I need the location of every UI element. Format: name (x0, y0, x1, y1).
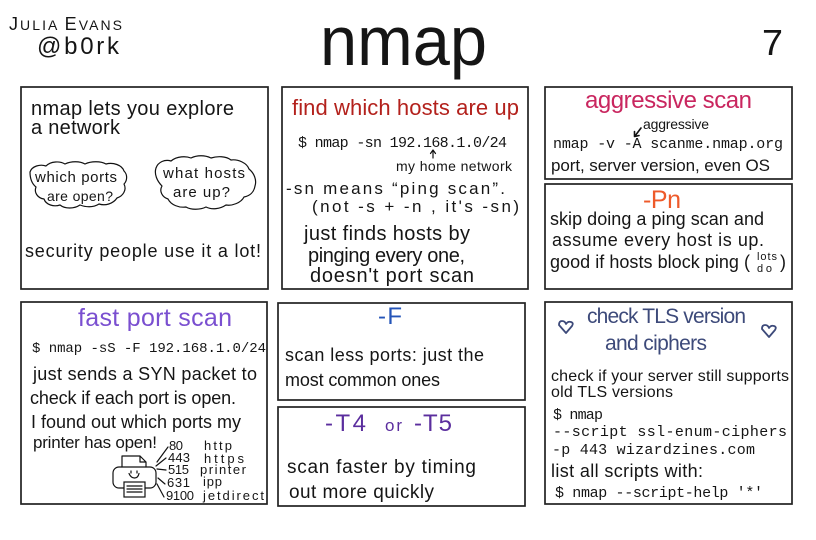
title: nmap (320, 2, 487, 80)
port list: 9100 (166, 488, 194, 503)
description: port, server version, even OS (551, 156, 770, 175)
author credit: JULIA EVANS (9, 14, 122, 34)
list scripts note: list all scripts with: (551, 461, 703, 481)
heading (325, 410, 452, 437)
description (550, 209, 786, 275)
command: $ nmap (553, 407, 603, 424)
port connector lines (156, 447, 168, 497)
explanation: (not -s + -n , it's -sn) (312, 197, 519, 216)
explanation: pinging every one, (308, 245, 465, 267)
port list: 80 (169, 438, 183, 453)
description: scan faster by timing (287, 457, 476, 478)
aggressive note: aggressive (643, 116, 709, 132)
panel: -F (278, 303, 525, 400)
panel: find which hosts are up (282, 87, 528, 289)
description: old TLS versions (551, 384, 673, 401)
port list: 515 (168, 462, 189, 477)
description: check if your server still supports (551, 368, 789, 385)
explanation: check if each port is open. (30, 388, 236, 408)
description: ) (780, 252, 786, 272)
cloud: what hosts are up (155, 156, 256, 209)
heading: and ciphers (605, 332, 707, 355)
explanation: doesn't port scan (310, 265, 474, 287)
icon: right heart (762, 325, 776, 337)
description: most common ones (285, 370, 440, 390)
heading: -F (378, 303, 402, 330)
description: assume every host is up. (552, 230, 764, 250)
port list: 631 (167, 475, 190, 490)
explanation: I found out which ports my (31, 412, 241, 432)
command: $ nmap -sn 192.168.1.0/24 (298, 135, 507, 152)
panel: fast port scan (21, 302, 267, 504)
panel: check TLS version and ciphers (545, 302, 792, 504)
panel: nmap intro (21, 87, 268, 289)
heading: -Pn (643, 186, 681, 214)
cloud: what hosts are up: what hosts (162, 165, 245, 182)
cloud: what hosts are up: are up? (173, 184, 230, 201)
port list: ipp (203, 474, 222, 489)
explanation: just finds hosts by (303, 223, 470, 245)
security note: security people use it a lot! (25, 241, 261, 261)
port list (166, 438, 264, 503)
command: --script ssl-enum-ciphers (553, 424, 787, 441)
cloud: which ports are open (30, 162, 127, 208)
command: -p 443 wizardzines.com (552, 442, 755, 459)
port list: printer (200, 462, 247, 477)
panel: -T4 or -T5 (278, 407, 525, 506)
description (285, 345, 484, 390)
heading: or (385, 416, 402, 435)
author credit: @b0rk (37, 33, 120, 60)
description (287, 457, 476, 503)
heading: aggressive scan (585, 87, 752, 114)
heading: find which hosts are up (292, 95, 519, 120)
heading: -T4 (325, 410, 366, 437)
icon: printer (113, 456, 156, 497)
heading: -T5 (414, 410, 452, 437)
help command: $ nmap --script-help '*' (555, 485, 763, 502)
description: out more quickly (289, 482, 434, 503)
port list: 443 (168, 450, 190, 465)
description: lots (757, 251, 778, 263)
explanation: printer has open! (33, 433, 157, 452)
panel: aggressive scan (545, 87, 792, 179)
page number: 7 (762, 22, 783, 63)
heading (587, 305, 746, 355)
intro text: a network (31, 117, 121, 139)
explanation: just sends a SYN packet to (32, 364, 257, 384)
description: do (757, 263, 772, 275)
heading: check TLS version (587, 305, 746, 328)
port list: jetdirect (202, 488, 264, 503)
explanation (30, 364, 257, 452)
intro text (31, 98, 234, 139)
cloud: which ports are open: which ports (34, 169, 117, 186)
icon: left heart (559, 321, 573, 333)
explanation (286, 179, 519, 287)
explanation: -sn means “ping scan”. (286, 179, 505, 198)
heading: fast port scan (78, 304, 232, 332)
panel: -Pn (545, 184, 792, 289)
port list: https (204, 451, 244, 466)
cloud: which ports are open: are open? (47, 188, 113, 204)
description: skip doing a ping scan and (550, 209, 764, 229)
description: scan less ports: just the (285, 345, 484, 365)
home network note: my home network (396, 158, 513, 174)
author credit (9, 14, 122, 60)
port list: http (204, 438, 232, 453)
description (551, 368, 789, 401)
command (552, 407, 787, 459)
intro text: nmap lets you explore (31, 98, 234, 120)
arrow: home network (430, 150, 436, 158)
command: nmap -v -A scanme.nmap.org (553, 136, 783, 153)
description: good if hosts block ping ( (550, 252, 750, 272)
command: $ nmap -sS -F 192.168.1.0/24 (32, 341, 266, 357)
arrow: aggressive flag (634, 128, 641, 136)
